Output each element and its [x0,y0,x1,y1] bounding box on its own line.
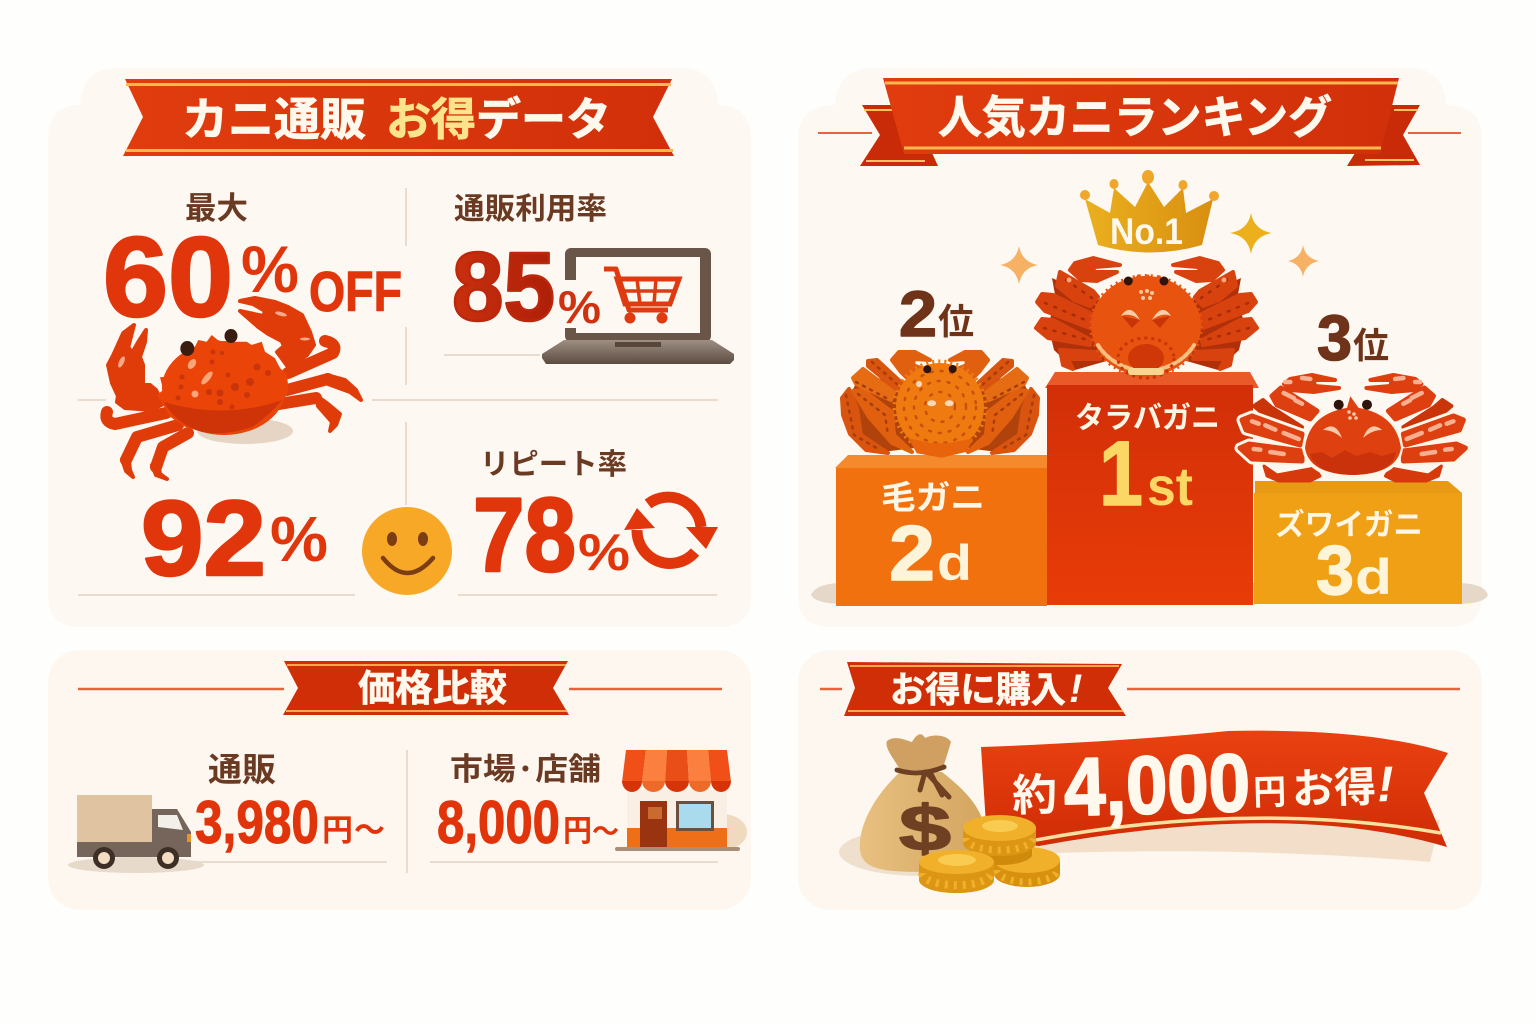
stat: リピート率 78% [473,441,630,594]
price: 市場・店舗 8,000円〜: ～ [592,810,619,849]
stat: 最大 60% OFF: OFF [309,260,402,324]
stat: 92% [141,478,328,598]
price: 市場・店舗 8,000円〜: 円 [563,806,592,850]
price: 市場・店舗 8,000円〜: 市場·店舗 [450,744,601,789]
stat: 92%: 92 [141,478,266,598]
icon: No.1 crown [1080,170,1219,252]
podium: 3rd ズワイガニ: d [1355,549,1392,605]
podium base shadow [811,583,1488,604]
savings text: 4,000 [1063,738,1251,834]
ribbon heading: 人気カニランキング: 人気カニランキング [938,81,1332,146]
stat: 通販利用率 85% [452,184,734,364]
savings text: 円 [1252,764,1287,816]
icon: No.1 crown: No.1 [1110,211,1183,252]
icon: storefront [615,750,747,851]
stat: リピート率 78%: リピート率 [480,441,627,483]
stat: 最大 60% OFF [103,183,402,340]
stat: リピート率 78%: 78 [473,477,576,594]
podium: 3rd ズワイガニ: 3 [1316,531,1354,609]
savings text [1011,734,1395,835]
icon: delivery truck [68,795,204,873]
label: 2位: 位 [938,293,974,345]
podium: 2nd 毛ガニ: 2 [889,509,935,597]
ribbon heading: 人気カニランキング [818,78,1461,166]
ribbon heading: 価格比較: 価格比較 [358,658,507,712]
dividers [152,750,718,873]
savings text: 約 [1011,759,1058,824]
panel: 価格比較 [48,650,751,910]
ribbon heading: お得に購入！: お得に購入 [890,661,1066,713]
crab claws [108,298,314,410]
label: 2位 [899,278,974,350]
price: 通販 3,980円〜 [195,743,385,856]
price: 通販 3,980円〜: 円 [322,805,353,850]
icon: タラバガニ crab [1036,258,1257,378]
dividers [78,188,718,595]
podium: 3rd ズワイガニ: ズワイガニ [1275,500,1423,544]
stat: 通販利用率 85%: % [558,281,601,333]
icon: shopping cart [604,269,679,324]
awning [622,750,731,792]
stat: リピート率 78%: % [578,524,630,582]
podium: 1st タラバガニ: 1 [1099,423,1143,525]
stat: 通販利用率 85%: 通販利用率 [454,184,607,228]
savings text: お得 [1291,753,1377,817]
label: 3位 [1317,302,1389,374]
ribbon heading: カニ通販 お得データ: カニ通販 [182,83,366,148]
stat: 最大 60% OFF: 60 [103,214,233,340]
icon: red crab [106,298,361,479]
price: 通販 3,980円〜: ～ [354,805,385,850]
podium: 2nd 毛ガニ: d [937,535,972,591]
stat: 通販利用率 85%: 85 [452,232,555,341]
podium: 2nd 毛ガニ: 毛ガニ [881,471,985,519]
icon: ズワイガニ crab [1240,375,1465,481]
podium: 2nd 毛ガニ [835,455,1047,606]
ribbon heading: お得に購入！: ! [1069,667,1082,711]
icon: laptop with cart [542,248,734,364]
stat: 92%: % [270,503,328,575]
price: 市場・店舗 8,000円〜 [437,744,619,856]
crab body [157,335,288,435]
icon: 毛ガニ crab [842,352,1038,458]
podium: 3rd ズワイガニ [1254,481,1462,609]
podium: 1st タラバガニ: st [1147,457,1193,517]
price: 通販 3,980円〜: 3,980 [195,789,319,856]
ribbon heading: カニ通販 お得データ: データ [476,83,611,148]
ribbon heading: 価格比較 [78,658,722,715]
savings text: ! [1376,756,1394,812]
label: 3位: 位 [1353,317,1389,369]
stat: 最大 60% OFF: 最大 [185,183,248,228]
price: 通販 3,980円〜: 通販 [208,743,276,791]
icon: money bag: $ [899,792,951,864]
label: 3位: 3 [1317,302,1352,374]
stat: 最大 60% OFF: % [241,232,299,306]
ribbon heading: お得に購入！ [820,661,1460,716]
icon: money bag [839,734,1001,876]
panel: カニ通販 お得データ [48,68,751,627]
icons: sparkles [1000,213,1319,284]
big savings ribbon [981,731,1448,862]
crab eyes [180,329,238,356]
ribbon heading: カニ通販 お得データ [123,79,674,156]
label: 2位: 2 [899,278,937,350]
ribbon heading: カニ通販 お得データ: お得 [386,83,476,148]
podium: 1st タラバガニ [1045,372,1259,605]
panel: 人気カニランキング [798,68,1488,627]
icon: gold coins [919,815,1060,893]
icon: smiley face [362,507,452,595]
podium: 1st タラバガニ: タラバガニ [1075,393,1220,437]
crab legs [106,341,361,479]
price: 市場・店舗 8,000円〜: 8,000 [437,789,560,856]
panel: お得に購入！ [798,650,1482,910]
icon: repeat arrows [624,497,718,563]
